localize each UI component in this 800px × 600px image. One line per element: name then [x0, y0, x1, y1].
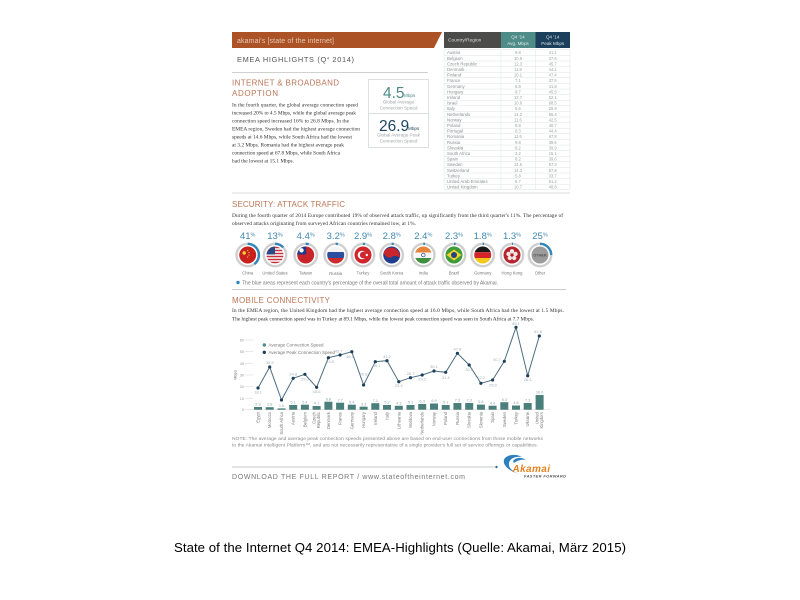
table rows: Belgium — [447, 56, 463, 61]
Taiwan: % — [310, 232, 315, 238]
x axis country labels: Ukraine — [525, 411, 530, 426]
South Korea: South Korea — [380, 270, 404, 276]
x axis country labels: United — [534, 411, 540, 424]
table rows: United Kingdom — [447, 185, 478, 190]
stat: 4.5 Mbps: Connection Speed — [380, 106, 418, 110]
Other: OTHER — [533, 254, 547, 258]
table rows: 8.2 — [515, 157, 522, 162]
Germany: % — [487, 232, 492, 238]
peak value labels: 25.0 — [489, 382, 498, 388]
stat: 26.9 Mbps: Mbps — [408, 126, 420, 131]
table rows: Russia — [447, 140, 461, 145]
Hong Kong: 1.3 — [503, 231, 516, 242]
peak value labels: 35.9 — [266, 360, 274, 365]
table rows: Ireland — [447, 95, 461, 100]
y axis: 50 — [240, 350, 244, 354]
Brazil: Brazil — [449, 270, 459, 276]
table rows: 10.6 — [514, 101, 523, 106]
y axis: 10 — [240, 397, 244, 401]
table rows: 14.3 — [514, 168, 523, 173]
bar value labels: 1.5 — [279, 404, 284, 408]
table rows: Sweden — [447, 162, 463, 167]
Other — [529, 231, 551, 276]
x axis country labels: Lithuania — [396, 411, 401, 429]
India — [412, 231, 434, 276]
United States — [262, 231, 288, 276]
Brazil — [443, 231, 465, 276]
download link: DOWNLOAD THE FULL REPORT / www.stateoftheinternet.com — [232, 474, 465, 481]
body text: speeds at 14.6 Mbps, while South Africa had the lowest — [232, 134, 352, 140]
Other: Other — [535, 270, 546, 276]
Germany — [472, 231, 494, 276]
security body text: During the fourth quarter of 2014 Europe contributed 19% of observed attack traffic, up significantly from the third quarter's 11%. The percentage of — [232, 212, 563, 219]
x axis country labels: Belgium — [302, 412, 307, 427]
body text: connection speed at 67.8 Mbps, while South Africa — [232, 150, 341, 156]
table rows: Austria — [447, 50, 461, 55]
table header: Peak Mbps — [541, 41, 565, 46]
table rows: 42.5 — [549, 117, 557, 122]
bar value labels: 4.1 — [314, 402, 319, 406]
peak value labels: 7.7 — [279, 393, 285, 398]
x axis country labels: Egypt — [256, 411, 260, 423]
chart note — [232, 436, 544, 448]
chart: mobile connection speeds — [232, 321, 550, 435]
Russia — [324, 231, 347, 276]
Hong Kong: % — [516, 232, 521, 238]
stat: 4.5 Mbps — [380, 85, 418, 110]
table rows: 11.6 — [514, 117, 523, 122]
India: % — [427, 232, 432, 238]
table rows: Germany — [447, 84, 466, 89]
table rows: Netherlands — [447, 112, 470, 117]
table header: Avg. Mbps — [507, 41, 530, 46]
Taiwan: Taiwan — [299, 270, 313, 276]
table rows: Portugal — [447, 129, 463, 134]
Turkey: % — [367, 232, 372, 238]
table rows: Czech Republic — [447, 61, 478, 66]
bar value labels: 16.0 — [536, 391, 543, 395]
peak value labels: 18.6 — [313, 389, 321, 394]
y axis: 30 — [240, 374, 244, 378]
x axis country labels — [256, 411, 544, 435]
subtitle: EMEA highlights: 4 — [327, 56, 330, 60]
table rows: 10.1 — [514, 73, 523, 78]
divider with dot — [232, 466, 498, 468]
table rows: 41.8 — [549, 84, 557, 89]
body text: connection speed increased 16% to 26.8 Mbps. In the — [232, 118, 350, 124]
bar value labels: 5.2 — [384, 401, 390, 405]
attack traffic flag rings — [236, 231, 551, 276]
bar value labels: 2.9 — [255, 402, 261, 406]
table rows: 8.7 — [515, 89, 522, 94]
bar value labels: 3.3 — [361, 402, 366, 406]
bar value labels: 2.8 — [267, 403, 272, 407]
stat: 26.9 Mbps: Connection Speed — [380, 138, 418, 144]
Taiwan — [294, 231, 317, 276]
table rows: 33.7 — [549, 173, 557, 178]
chart note: NOTE: The average and average peak connection speeds presented above are based on end-user connections from those mobile networks — [232, 436, 544, 442]
bar value labels: 6.3 — [420, 400, 425, 404]
United States: % — [278, 232, 283, 238]
Germany: Germany — [474, 270, 492, 276]
y axis: Mbps — [232, 370, 238, 380]
peak value labels: 18.1 — [254, 390, 263, 394]
peak value labels: 45.7 — [335, 348, 343, 354]
table rows: 8.8 — [515, 123, 522, 128]
Russia: % — [340, 232, 345, 238]
table rows: Turkey — [447, 173, 461, 178]
body text: had the lowest at 15.1 Mbps. — [232, 158, 294, 164]
India: India — [419, 270, 429, 276]
table rows: Denmark — [447, 67, 465, 72]
stat: 26.9 Mbps: Global Average Peak — [377, 132, 421, 138]
x axis country labels: Sweden — [502, 411, 507, 427]
table rows: 5.7 — [515, 179, 522, 184]
body text: In the fourth quarter, the global average connection speed — [232, 102, 358, 108]
bar value labels: 6.9 — [431, 399, 437, 403]
Russia: 3.2 — [327, 231, 340, 242]
flag legend note: The blue areas represent each country's percentage of the overall total amount of attack traffic observed by Akamai. — [242, 280, 498, 286]
peak value labels: 41.2 — [383, 354, 392, 359]
table rows: 57.3 — [549, 162, 557, 167]
bar value labels: 5.4 — [349, 400, 354, 404]
table rows: South Africa — [447, 151, 471, 156]
infographic page — [232, 32, 570, 481]
y axis: 40 — [240, 362, 244, 366]
peak value labels: 40.7 — [493, 357, 502, 362]
table rows: 9.8 — [515, 140, 522, 145]
table rows: 12.3 — [514, 61, 523, 66]
panel: internet and broadband adoption text — [232, 78, 360, 164]
x axis country labels: Norway — [432, 411, 436, 426]
peak value labels: 23.4 — [395, 383, 403, 388]
heading: internet and broadband adoption: INTERNET & BROADBAND — [232, 78, 339, 88]
table rows: 10.9 — [514, 56, 523, 61]
table rows: 48.8 — [549, 185, 557, 190]
header banner — [232, 32, 442, 48]
stat: 4.5 Mbps: Global Average — [383, 100, 415, 104]
Turkey: Turkey — [357, 270, 370, 276]
x axis country labels: Czech — [312, 411, 316, 424]
legend: Average Peak Connection Speed — [268, 350, 335, 355]
Akamai logo: Akamai — [512, 464, 550, 475]
x axis country labels: France — [338, 411, 343, 425]
peak value labels: 29.0 — [301, 376, 310, 382]
table rows: 5.8 — [515, 173, 522, 178]
x axis country labels: Turkey — [514, 411, 518, 425]
table rows: 11.9 — [514, 67, 523, 72]
peak value labels: 89.1 — [512, 321, 521, 326]
bar value labels: 8.3 — [502, 398, 507, 402]
Taiwan: 4.4 — [297, 231, 310, 242]
bar value labels: 4.6 — [513, 401, 519, 405]
Brazil: % — [458, 232, 463, 238]
table rows: 26.9 — [549, 106, 557, 111]
legend: Average Connection Speed — [268, 343, 324, 348]
heading: internet and broadband adoption — [232, 78, 339, 98]
x axis country labels: Morocco — [267, 411, 272, 428]
bar value labels: 4.4 — [490, 401, 495, 405]
table rows: Spain — [447, 157, 459, 162]
table rows: 37.5 — [549, 78, 557, 83]
y axis: 20 — [240, 385, 244, 389]
table rows: 3.2 — [515, 151, 522, 156]
peak value labels: 31.4 — [442, 375, 450, 380]
heading: internet and broadband adoption: ADOPTION — [232, 89, 278, 98]
table rows: 8.8 — [515, 84, 522, 89]
table rows: 44.1 — [549, 67, 557, 72]
peak value labels: 22.2 — [477, 375, 486, 380]
y axis — [232, 338, 550, 412]
x axis country labels: Austria — [291, 411, 296, 425]
x axis country labels: Russia — [455, 411, 460, 425]
stat: 4.5 Mbps: 4.5 — [383, 85, 405, 102]
table rows: 67.8 — [549, 134, 557, 139]
peak value labels: 43.8 — [326, 359, 335, 364]
header banner: akamai's [state of the internet] — [237, 38, 334, 45]
x axis country labels: Hungary — [361, 411, 366, 428]
peak value labels: 30.2 — [465, 367, 474, 372]
table rows: Italy — [447, 106, 456, 111]
bar value labels: 7.3 — [525, 399, 530, 403]
table rows: 45.7 — [549, 61, 557, 66]
peak value labels: 46.8 — [346, 354, 355, 359]
bar value labels — [255, 391, 543, 408]
bar value labels: 8.8 — [326, 397, 331, 401]
table rows: Switzerland — [447, 168, 470, 173]
x axis country labels: Italy — [384, 411, 390, 420]
Hong Kong — [501, 231, 523, 276]
table rows: Poland — [447, 123, 461, 128]
Hong Kong: Hong Kong — [502, 270, 523, 276]
table rows: 8.3 — [515, 129, 522, 134]
Turkey — [352, 231, 374, 276]
table rows: 51.2 — [549, 179, 557, 184]
peak value labels — [254, 321, 543, 398]
table rows: Romania — [447, 134, 465, 139]
x axis country labels: Denmark — [326, 411, 331, 429]
stat: 26.9 Mbps: 26.9 — [379, 118, 409, 135]
mobile body text: The highest peak connection speed was in Turkey at 89.1 Mbps, while the lowest peak connection speed was seen in South Africa at 7.7 Mbps. — [232, 316, 534, 322]
x axis country labels: Ireland — [373, 411, 378, 425]
table rows: 15.1 — [549, 151, 557, 156]
bar value labels: 4.3 — [396, 401, 401, 405]
table rows: 39.6 — [549, 140, 557, 145]
Russia: Russia — [329, 271, 343, 276]
Germany: 1.8 — [474, 231, 487, 242]
China: China — [242, 270, 254, 276]
x axis country labels: Netherlands — [420, 412, 425, 435]
table rows: 47.4 — [549, 73, 557, 78]
mobile body text: In the EMEA region, the United Kingdom had the highest average connection speed at 16.0 Mbps, while South Africa had the lowest at 1.5 Mbps. — [232, 307, 564, 314]
peak value labels: 40.1 — [373, 363, 381, 368]
body text: at 3.2 Mbps. Romania had the highest average peak — [232, 142, 344, 148]
table rows: Finland — [447, 73, 462, 78]
panel: global speed stats — [368, 80, 428, 148]
peak value labels: 61.8 — [534, 329, 543, 334]
table rows: 52.1 — [549, 95, 557, 100]
Akamai logo — [504, 455, 566, 478]
peak value labels: 26.7 — [407, 371, 415, 376]
table rows: 8.2 — [515, 145, 522, 150]
peak value labels: 30.1 — [430, 364, 439, 369]
peak value labels: 47.8 — [454, 346, 462, 352]
bar value labels: 7.7 — [337, 398, 343, 402]
table rows: 39.9 — [549, 145, 557, 150]
bar value labels: 5.1 — [443, 401, 448, 405]
caption: State of the Internet Q4 2014: EMEA-Highlights (Quelle: Akamai, März 2015) — [174, 540, 626, 555]
legend — [263, 343, 335, 355]
table rows: France — [447, 78, 461, 83]
mobile body text — [232, 307, 564, 322]
table rows: 37.6 — [549, 56, 557, 61]
Other: 25 — [532, 231, 543, 242]
table header: Q4 '14 — [546, 34, 560, 40]
body text — [232, 102, 360, 164]
stat: 4.5 Mbps: Mbps — [404, 93, 416, 98]
table rows: 7.1 — [515, 78, 522, 83]
y axis: 60 — [240, 338, 244, 342]
bar value labels: 5.4 — [302, 400, 308, 404]
China: 41 — [240, 231, 251, 242]
table header: Country/Region — [448, 38, 482, 44]
United States: United States — [262, 270, 288, 276]
x axis country labels: Moldova — [408, 411, 413, 428]
table rows: 9.8 — [515, 50, 522, 55]
Other: % — [543, 232, 548, 238]
table rows: Hungary — [447, 89, 464, 94]
table: country speeds — [444, 32, 570, 190]
peak value labels: 29.2 — [418, 376, 427, 382]
line: peak connection speed — [256, 326, 541, 402]
bar value labels: 5.1 — [291, 401, 296, 405]
x axis country labels: Poland — [443, 411, 448, 425]
table rows: 44.4 — [549, 129, 557, 134]
table rows: United Arab Emirates — [447, 179, 488, 184]
peak value labels: 20.8 — [360, 372, 368, 376]
security body text — [232, 212, 563, 227]
heading: mobile connectivity: MOBILE CONNECTIVITY — [232, 296, 331, 305]
table rows: 57.8 — [549, 168, 557, 173]
Brazil: 2.3 — [445, 231, 458, 242]
stat: 26.9 Mbps — [377, 118, 421, 144]
South Korea: % — [396, 232, 401, 238]
South Korea: 2.8 — [383, 231, 396, 242]
x axis country labels: Republic — [316, 412, 321, 428]
table header: Q4 '14 — [511, 34, 525, 40]
peak value labels: 26.4 — [524, 377, 532, 382]
bar value labels: 7.3 — [467, 399, 472, 403]
y axis: 0 — [242, 408, 244, 412]
bars: average connection speed — [254, 395, 544, 410]
heading: security attack traffic: SECURITY: ATTACK TRAFFIC — [232, 200, 345, 209]
subtitle: EMEA highlights: EMEA HIGHLIGHTS (Q — [237, 55, 326, 64]
bar value labels: 7.3 — [455, 399, 460, 403]
table rows: 56.4 — [549, 112, 557, 117]
x axis country labels: Kingdom — [539, 411, 544, 429]
subtitle: EMEA highlights: 2014) — [330, 55, 354, 64]
table rows: Israel — [447, 101, 458, 106]
x axis country labels: South Africa — [279, 411, 284, 435]
peak value labels: 24.8 — [289, 372, 298, 376]
South Korea — [380, 231, 404, 276]
Akamai logo: FASTER FORWARD — [524, 474, 566, 478]
chart note: to the Akamai Intelligent Platform™, and are not necessarily representative of a single provider's full set of service offerings or capabilities. — [232, 442, 538, 448]
United States: 13 — [267, 231, 278, 242]
table rows: 14.2 — [514, 112, 523, 117]
body text: EMEA region, Sweden had the highest average connection — [232, 126, 360, 132]
Turkey: 2.9 — [354, 231, 367, 242]
x axis country labels: Slovenia — [478, 411, 483, 428]
x axis country labels: Germany — [349, 411, 354, 429]
body text: increased 20% to 4.5 Mbps, while the global average peak — [232, 110, 356, 116]
table rows: 41.1 — [549, 50, 557, 55]
table rows: 45.5 — [549, 89, 557, 94]
x axis country labels: Spain — [490, 411, 495, 423]
table header — [444, 32, 570, 48]
table rows — [447, 50, 557, 190]
table rows: Norway — [447, 117, 462, 122]
table rows: 68.5 — [549, 101, 557, 106]
table rows: 5.6 — [515, 106, 522, 111]
table rows: 11.6 — [514, 134, 523, 139]
table rows: 39.6 — [549, 157, 557, 162]
China: % — [251, 232, 256, 238]
table rows: Slovakia — [447, 145, 464, 150]
table rows: 10.7 — [514, 185, 523, 190]
table rows: 40.7 — [549, 123, 557, 128]
table rows: 14.6 — [514, 162, 523, 167]
China — [236, 231, 259, 276]
bar value labels: 5.6 — [478, 400, 484, 404]
bar value labels: 7.1 — [373, 399, 378, 403]
security body text: observed attacks originating from surveyed African countries remained low, at 1%. — [232, 220, 416, 227]
table rows: 12.7 — [514, 95, 523, 100]
bar value labels: 5.1 — [408, 401, 413, 405]
x axis country labels: Slovakia — [467, 411, 472, 428]
India: 2.4 — [414, 231, 427, 242]
